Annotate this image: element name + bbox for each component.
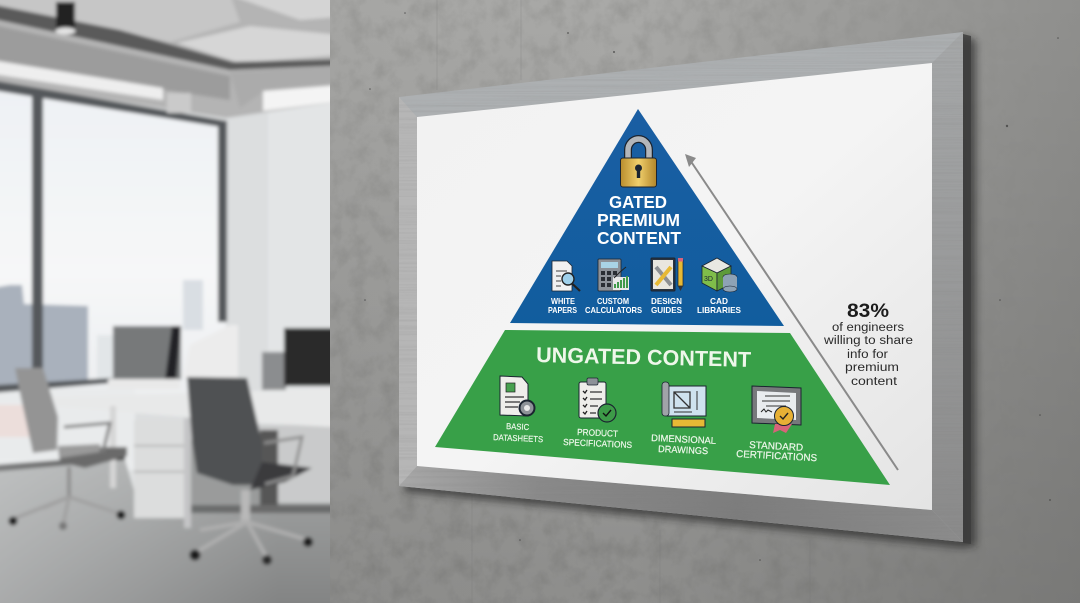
- label: custom calculators: [585, 296, 642, 315]
- concrete wall: [330, 0, 1080, 603]
- white poster panel: [417, 63, 932, 510]
- label: design guides: [651, 296, 682, 315]
- background: blurred office interior: [0, 0, 350, 603]
- desk: [108, 391, 330, 530]
- ceiling duct fixture: [167, 93, 191, 113]
- callout text: content: [851, 376, 898, 388]
- window glass with city: [0, 84, 226, 470]
- label: standard certifications: CERTIFICATIONS: [736, 449, 818, 464]
- frame shadow: [404, 34, 976, 548]
- label: design guides: GUIDES: [651, 305, 682, 315]
- ceiling: [0, 0, 350, 118]
- icon: dimensional drawings: [662, 382, 706, 427]
- panel: ungated content (green trapezoid): [435, 330, 890, 485]
- label: CAD libraries: [697, 296, 741, 315]
- label: CAD libraries: LIBRARIES: [697, 305, 741, 315]
- callout number: 83%: [847, 300, 889, 322]
- icon: product specifications: [579, 378, 616, 422]
- label: custom calculators: CUSTOM: [597, 296, 629, 306]
- callout text: premium: [845, 362, 899, 374]
- monitors: [108, 325, 339, 390]
- left office chair: [8, 368, 127, 530]
- callout text: info for: [847, 349, 888, 361]
- label: product specifications: PRODUCT: [577, 427, 619, 439]
- window frame: [0, 78, 227, 476]
- arrow: rising toward gated content: [685, 154, 898, 470]
- label: custom calculators: CALCULATORS: [585, 305, 642, 315]
- label: dimensional drawings: [651, 433, 716, 457]
- label: standard certifications: STANDARD: [749, 440, 803, 454]
- icon: custom calculators: [598, 259, 629, 291]
- label: CAD libraries: CAD: [710, 296, 728, 306]
- label: standard certifications: [736, 440, 818, 464]
- label: white papers: PAPERS: [548, 305, 577, 315]
- label: product specifications: SPECIFICATIONS: [563, 437, 632, 450]
- icon: CAD libraries: [702, 258, 737, 292]
- icon: white papers: [552, 261, 580, 291]
- right office chair: [187, 377, 313, 565]
- label: dimensional drawings: DRAWINGS: [658, 444, 708, 457]
- label: design guides: DESIGN: [651, 296, 682, 306]
- label: basic datasheets: [493, 421, 544, 444]
- heading: ungated content: UNGATED CONTENT: [536, 343, 751, 372]
- label: dimensional drawings: DIMENSIONAL: [651, 433, 716, 447]
- brushed metal frame: [399, 32, 963, 542]
- callout: 83% of engineers: [823, 300, 913, 388]
- callout text: willing to share: [823, 335, 913, 347]
- heading: gated premium content: GATED: [609, 192, 667, 212]
- callout text: [823, 322, 913, 388]
- heading: gated premium content: CONTENT: [597, 228, 681, 248]
- ceiling spotlight: [56, 2, 76, 34]
- icon: CAD libraries: 3D: [704, 276, 713, 283]
- callout text: of engineers: [832, 322, 904, 334]
- label: white papers: WHITE: [551, 296, 575, 306]
- icon: standard certifications: [752, 386, 801, 433]
- heading: gated premium content: PREMIUM: [597, 210, 680, 230]
- under-desk back wall: [190, 425, 340, 513]
- label: white papers: [548, 296, 577, 315]
- icon: basic datasheets: [500, 376, 534, 416]
- label: product specifications: [563, 427, 632, 450]
- icon: design guides: [651, 258, 683, 291]
- floor: [0, 460, 350, 603]
- icon: padlock: [620, 139, 656, 187]
- heading: gated premium content: [597, 192, 681, 248]
- panel: gated premium content (blue triangle): [510, 109, 784, 326]
- label: basic datasheets: DATASHEETS: [493, 432, 544, 444]
- label: basic datasheets: BASIC: [506, 421, 529, 432]
